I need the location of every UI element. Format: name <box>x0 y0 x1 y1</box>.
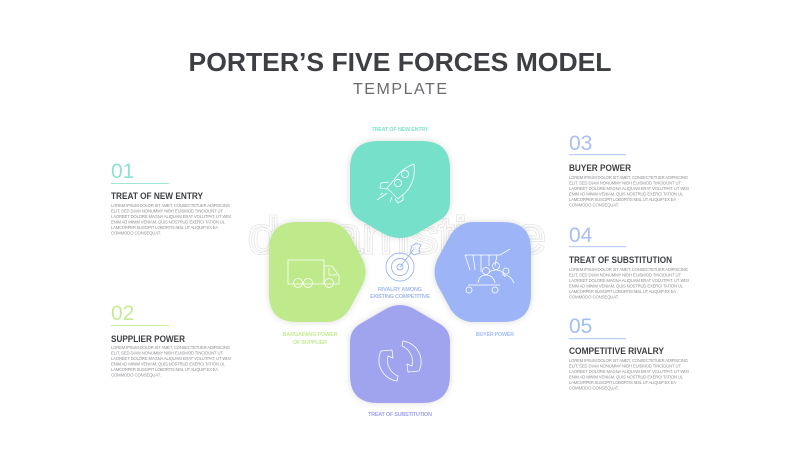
block 02: supplier power: LAMCORPER SUSCIPIT LOBORTIS NISL UT ALIQUIP EX EA <box>111 367 218 372</box>
block 05: competitive rivalry <box>569 315 689 390</box>
panel: rivalry among existing competitive <box>370 243 430 300</box>
label: treat of substitution: TREAT OF SUBSTITUTION <box>368 412 432 418</box>
icon: circular arrows <box>379 341 421 381</box>
block 02: supplier power: LOREM IPSUM DOLOR SIT AMET, CONSECTETUER ADIPISCING <box>111 345 230 350</box>
block 03: buyer power: LAMCORPER SUSCIPIT LOBORTIS NISL UT ALIQUIP EX EA <box>569 197 676 202</box>
block 03: buyer power: COMMODO CONSEQUAT. <box>569 202 619 208</box>
icon: rocket <box>377 164 414 203</box>
block 01: treat of new entry: COMMODO CONSEQUAT. <box>111 230 161 236</box>
block 03: buyer power: 03 <box>569 132 592 155</box>
block 03: buyer power: LAOREET DOLORE MAGNA ALIQUAM ERAT VOLUTPAT. UT WISI <box>569 186 689 191</box>
block 01: treat of new entry: 01 <box>111 160 134 183</box>
block 02: supplier power: SUPPLIER POWER <box>111 334 186 344</box>
block 02: supplier power: ELIT, SED DIAM NONUMMY NIBH EUISMOD TINCIDUNT UT <box>111 350 223 356</box>
label: rivalry among existing competitive: RIVALRY AMONG <box>378 287 422 293</box>
icon: shopping cart and people <box>465 249 514 293</box>
block 04: treat of substitution: LOREM IPSUM DOLOR SIT AMET, CONSECTETUER ADIPISCING <box>569 267 688 272</box>
block 04: treat of substitution: TREAT OF SUBSTITUTION <box>569 255 672 265</box>
label: bargaining power of supplier: BARGAINING POWER <box>282 332 338 338</box>
panel: buyer power <box>434 222 531 338</box>
block 01: treat of new entry: TREAT OF NEW ENTRY <box>111 191 203 201</box>
shape: purple pentagon <box>350 305 450 403</box>
label: treat of new entry: TREAT OF NEW ENTRY <box>372 127 429 133</box>
block 03: buyer power: LOREM IPSUM DOLOR SIT AMET, CONSECTETUER ADIPISCING <box>569 175 688 180</box>
block 01: treat of new entry: LAOREET DOLORE MAGNA ALIQUAM ERAT VOLUTPAT. UT WISI <box>111 214 231 219</box>
block 01: treat of new entry: ENIM AD MINIM VENIAM, QUIS NOSTRUD EXERCI TATION UL <box>111 220 226 224</box>
label: rivalry among existing competitive: EXISTING COMPETITIVE <box>370 294 430 300</box>
watermark: dreamstime <box>248 207 546 264</box>
icon: target with arrow <box>386 243 421 281</box>
block 02: supplier power <box>111 302 231 378</box>
block 02: supplier power: ENIM AD MINIM VENIAM, QUIS NOSTRUD EXERCI TATION UL <box>111 362 226 366</box>
block 05: competitive rivalry: 05 <box>569 315 592 338</box>
block 01: treat of new entry: LAMCORPER SUSCIPIT LOBORTIS NISL UT ALIQUIP EX EA <box>111 225 218 230</box>
block 02: supplier power: COMMODO CONSEQUAT. <box>111 372 161 378</box>
label: rivalry among existing competitive <box>370 287 430 300</box>
block 05: competitive rivalry: COMPETITIVE RIVALRY <box>569 346 664 356</box>
block 04: treat of substitution <box>569 224 689 300</box>
block 04: treat of substitution: LAOREET DOLORE MAGNA ALIQUAM ERAT VOLUTPAT. UT WISI <box>569 278 689 283</box>
block 04: treat of substitution: COMMODO CONSEQUAT. <box>569 294 619 300</box>
shape: teal pentagon <box>350 141 450 238</box>
label: buyer power: BUYER POWER <box>476 332 514 338</box>
block 05: competitive rivalry: ELIT, SED DIAM NONUMMY NIBH EUISMOD TINCIDUNT UT <box>569 364 681 368</box>
label: bargaining power of supplier <box>282 332 338 346</box>
block 02: supplier power: 02 <box>111 302 134 325</box>
title: PORTER’S FIVE FORCES MODEL <box>188 49 612 77</box>
block 05: competitive rivalry: LAOREET DOLORE MAGNA ALIQUAM ERAT VOLUTPAT. UT WISI <box>569 369 689 374</box>
block 04: treat of substitution: LAMCORPER SUSCIPIT LOBORTIS NISL UT ALIQUIP EX EA <box>569 289 676 294</box>
block 03: buyer power: BUYER POWER <box>569 163 632 173</box>
icon: delivery truck <box>288 260 339 288</box>
block 01: treat of new entry <box>111 160 231 236</box>
block 05: competitive rivalry: COMMODO CONSEQUAT. <box>569 386 619 390</box>
panel: treat of substitution <box>350 305 450 418</box>
block 04: treat of substitution: 04 <box>569 224 593 247</box>
panel: bargaining power of supplier <box>269 222 366 346</box>
block 05: competitive rivalry: ENIM AD MINIM VENIAM, QUIS NOSTRUD EXERCI TATION UL <box>569 374 684 380</box>
subtitle: TEMPLATE <box>353 81 447 98</box>
shape: green pentagon <box>269 222 366 322</box>
block 05: competitive rivalry: LAMCORPER SUSCIPIT LOBORTIS NISL UT ALIQUIP EX EA <box>569 380 676 385</box>
watermark: dreamstime <box>248 207 546 264</box>
block 02: supplier power: LAOREET DOLORE MAGNA ALIQUAM ERAT VOLUTPAT. UT WISI <box>111 356 231 361</box>
block 03: buyer power: ELIT, SED DIAM NONUMMY NIBH EUISMOD TINCIDUNT UT <box>569 180 681 186</box>
block 04: treat of substitution: ENIM AD MINIM VENIAM, QUIS NOSTRUD EXERCI TATION UL <box>569 284 684 288</box>
block 01: treat of new entry: LOREM IPSUM DOLOR SIT AMET, CONSECTETUER ADIPISCING <box>111 203 230 208</box>
block 04: treat of substitution: ELIT, SED DIAM NONUMMY NIBH EUISMOD TINCIDUNT UT <box>569 272 681 278</box>
panel: treat of new entry <box>350 127 450 238</box>
block 03: buyer power <box>569 132 689 208</box>
block 01: treat of new entry: ELIT, SED DIAM NONUMMY NIBH EUISMOD TINCIDUNT UT <box>111 208 223 214</box>
block 03: buyer power: ENIM AD MINIM VENIAM, QUIS NOSTRUD EXERCI TATION UL <box>569 192 684 196</box>
label: bargaining power of supplier: OF SUPPLIER <box>293 340 327 346</box>
block 05: competitive rivalry: LOREM IPSUM DOLOR SIT AMET, CONSECTETUER ADIPISCING <box>569 358 688 363</box>
shape: blue pentagon <box>434 222 531 322</box>
